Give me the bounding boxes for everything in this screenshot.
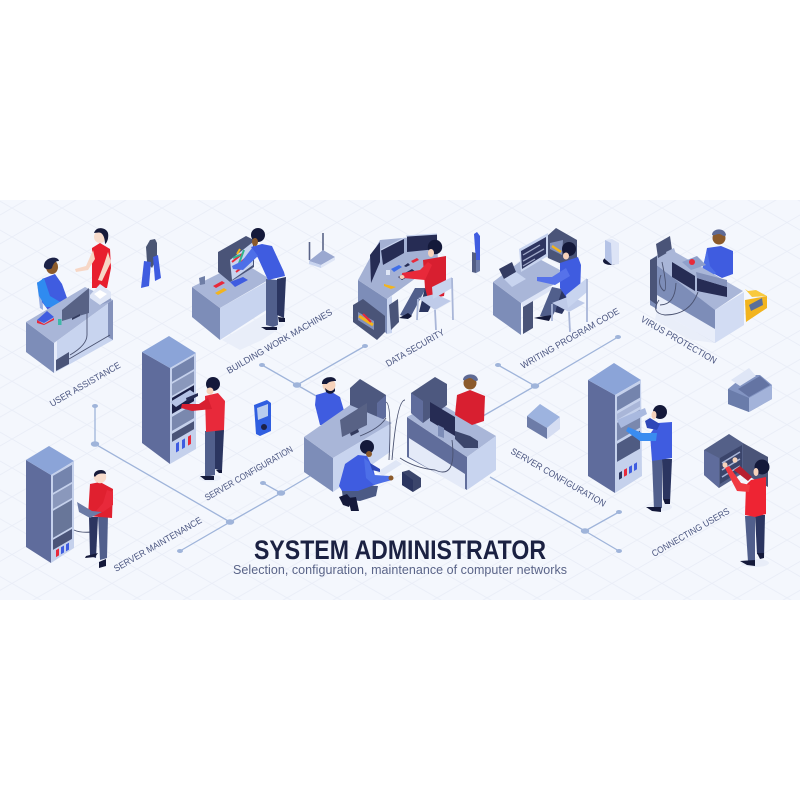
person: crouching man plugging in cables xyxy=(339,440,394,511)
open computer case xyxy=(218,236,254,282)
power strip xyxy=(377,460,402,476)
left monitor xyxy=(340,403,367,437)
tower: right xyxy=(411,377,447,423)
three monitors xyxy=(370,234,437,283)
chair xyxy=(552,278,587,332)
scene: data security xyxy=(353,234,453,340)
label: data security: DATA SECURITY xyxy=(384,327,446,369)
scene: central workstations xyxy=(304,374,496,511)
desk xyxy=(192,262,270,340)
icon: crimping tool xyxy=(141,239,161,288)
desk xyxy=(26,287,113,373)
open case with cables xyxy=(353,299,385,340)
desk xyxy=(358,235,438,334)
person: server technician in red xyxy=(181,377,225,482)
icon: storage unit xyxy=(527,404,560,439)
chair xyxy=(417,277,453,330)
code monitor xyxy=(519,233,548,272)
rack: server configuration right xyxy=(588,363,647,493)
printer on desk xyxy=(90,284,111,305)
tower: left xyxy=(350,379,386,425)
icon: network device xyxy=(603,239,619,265)
rack: server maintenance xyxy=(26,446,74,563)
person: woman in red xyxy=(75,228,111,288)
icon: printer xyxy=(728,368,772,412)
connector lines: top network xyxy=(259,344,368,401)
scene: user assistance xyxy=(26,228,113,373)
label: server maintenance: SERVER MAINTENANCE xyxy=(112,515,204,574)
floor shadow xyxy=(655,310,715,343)
desk xyxy=(650,248,744,343)
back computer xyxy=(545,228,577,265)
scene: virus protection xyxy=(650,229,767,343)
icon: network tester xyxy=(254,400,271,436)
label: building work machines: BUILDING WORK MACHINES xyxy=(225,307,334,376)
scene: writing program code xyxy=(493,228,587,335)
floor shadow xyxy=(222,312,285,350)
person: technician in blue xyxy=(702,229,733,278)
subtitle: Selection, configuration, maintenance of computer networks xyxy=(233,563,567,577)
right desk xyxy=(407,401,496,490)
label: connecting users: CONNECTING USERS xyxy=(650,506,731,559)
person: technician in blue at rack xyxy=(626,405,672,512)
connector lines: lower right network xyxy=(490,477,622,553)
right monitor and box xyxy=(430,402,478,448)
title: SYSTEM ADMINISTRATOR xyxy=(254,535,546,565)
left desk xyxy=(304,405,392,492)
label: server configuration right: SERVER CONFIGURATION xyxy=(509,446,608,509)
background band xyxy=(0,200,800,600)
label: writing program code: WRITING PROGRAM CODE xyxy=(519,306,621,371)
scene: building work machines xyxy=(192,228,286,350)
desk items xyxy=(384,258,419,289)
person: man in red seated xyxy=(399,240,446,319)
connector lines: right network xyxy=(483,335,621,416)
components on desk xyxy=(199,276,248,295)
computer under desk and cables xyxy=(56,310,110,371)
icon: usb stick xyxy=(472,232,480,273)
connector lines: left network xyxy=(91,404,320,553)
person: programmer in blue xyxy=(534,242,581,321)
cables xyxy=(656,262,698,315)
person: technician with laptop xyxy=(74,470,113,568)
person: bearded man in blue xyxy=(315,377,345,425)
tower under desk xyxy=(389,299,399,330)
tower and back monitor xyxy=(650,236,677,305)
person: technician in red at cabinet xyxy=(722,457,770,567)
person: seated man in blue xyxy=(37,258,67,310)
label: server configuration left: SERVER CONFIGURATION xyxy=(203,444,295,503)
icon: wifi router xyxy=(309,233,335,268)
cables xyxy=(360,400,453,472)
tower under desk xyxy=(523,301,533,334)
label: user assistance: USER ASSISTANCE xyxy=(48,360,122,409)
rack: server configuration left xyxy=(142,336,196,464)
desk xyxy=(493,254,560,335)
monitor xyxy=(62,288,89,321)
wall network cabinet xyxy=(704,434,768,488)
small box on floor xyxy=(402,470,421,492)
books and cup xyxy=(37,311,62,325)
label: virus protection: VIRUS PROTECTION xyxy=(639,314,718,366)
two front monitors xyxy=(672,256,727,297)
person: man in blue at computer xyxy=(232,228,286,330)
laptop xyxy=(499,262,526,287)
yellow open box xyxy=(745,289,767,322)
rack keyboard shelf xyxy=(170,390,198,407)
person: man in red xyxy=(455,374,485,425)
